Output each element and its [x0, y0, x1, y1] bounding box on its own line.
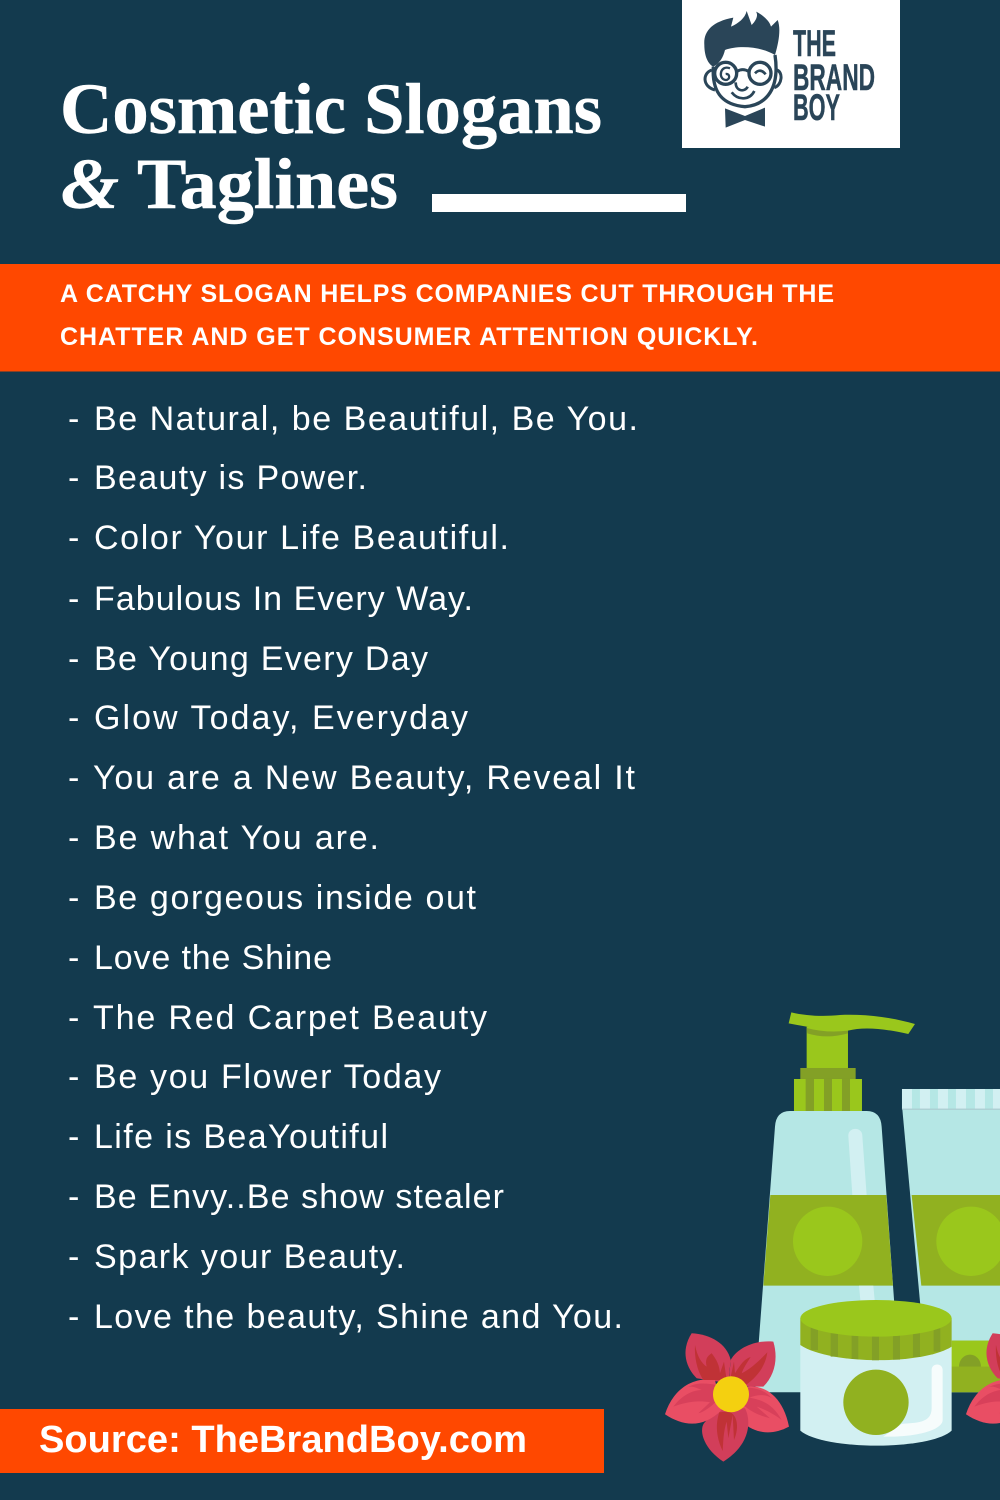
- slogan list: -: [68, 879, 79, 917]
- slogan list: Love the Shine: [94, 939, 332, 977]
- slogan list: -: [68, 699, 79, 737]
- slogan list: -: [68, 1298, 79, 1336]
- icon: pump bottle: [755, 1012, 915, 1392]
- icon: flower left: [665, 1333, 789, 1462]
- subtitle banner: A CATCHY SLOGAN HELPS COMPANIES CUT THROUGH THE: [60, 280, 834, 308]
- logo wordmark: [793, 23, 875, 128]
- logo: The Brand Boy: [682, 0, 900, 148]
- subtitle banner: [0, 264, 1000, 372]
- slogan list: Be Natural, be Beautiful, Be You.: [94, 400, 638, 438]
- slogan list: Be you Flower Today: [94, 1058, 441, 1096]
- icon: cream jar: [800, 1300, 952, 1446]
- slogan list: Be gorgeous inside out: [94, 879, 477, 917]
- slogan list: Be Young Every Day: [94, 640, 428, 678]
- logo mascot face: [704, 11, 781, 128]
- cosmetics illustration: [665, 1012, 1000, 1462]
- slogan list: -: [68, 1058, 79, 1096]
- title: [60, 69, 602, 224]
- slogan list: [68, 400, 638, 1336]
- slogan list: -: [68, 999, 79, 1037]
- slogan list: Fabulous In Every Way.: [94, 580, 473, 618]
- slogan list: -: [68, 400, 79, 438]
- title: Cosmetic Slogans: [60, 69, 602, 149]
- title underline bar: [432, 194, 686, 212]
- slogan list: Love the beauty, Shine and You.: [94, 1298, 623, 1336]
- slogan list: Life is BeaYoutiful: [94, 1118, 388, 1156]
- slogan list: -: [68, 819, 79, 857]
- icon: flower right (cropped): [966, 1333, 1000, 1462]
- slogan list: -: [68, 459, 79, 497]
- slogan list: -: [68, 759, 79, 797]
- slogan list: Beauty is Power.: [94, 459, 367, 497]
- slogan list: Be what You are.: [94, 819, 379, 857]
- slogan list: -: [68, 1178, 79, 1216]
- logo wordmark: BRAND: [793, 57, 875, 98]
- slogan list: Spark your Beauty.: [94, 1238, 405, 1276]
- logo wordmark: BOY: [793, 87, 840, 128]
- source banner: Source: TheBrandBoy.com: [39, 1419, 527, 1461]
- title: Taglines: [137, 144, 398, 224]
- logo wordmark: THE: [793, 23, 836, 64]
- slogan list: -: [68, 1118, 79, 1156]
- source banner: [0, 1409, 604, 1473]
- title: &: [61, 144, 119, 224]
- slogan list: The Red Carpet Beauty: [93, 999, 487, 1037]
- subtitle banner: CHATTER AND GET CONSUMER ATTENTION QUICKLY.: [60, 323, 758, 351]
- slogan list: Color Your Life Beautiful.: [94, 519, 509, 557]
- slogan list: -: [68, 1238, 79, 1276]
- slogan list: -: [68, 640, 79, 678]
- slogan list: -: [68, 519, 79, 557]
- slogan list: Glow Today, Everyday: [94, 699, 468, 737]
- slogan list: -: [68, 580, 79, 618]
- icon: tube: [902, 1089, 1000, 1392]
- slogan list: -: [68, 939, 79, 977]
- slogan list: Be Envy..Be show stealer: [94, 1178, 504, 1216]
- slogan list: You are a New Beauty, Reveal It: [93, 759, 636, 797]
